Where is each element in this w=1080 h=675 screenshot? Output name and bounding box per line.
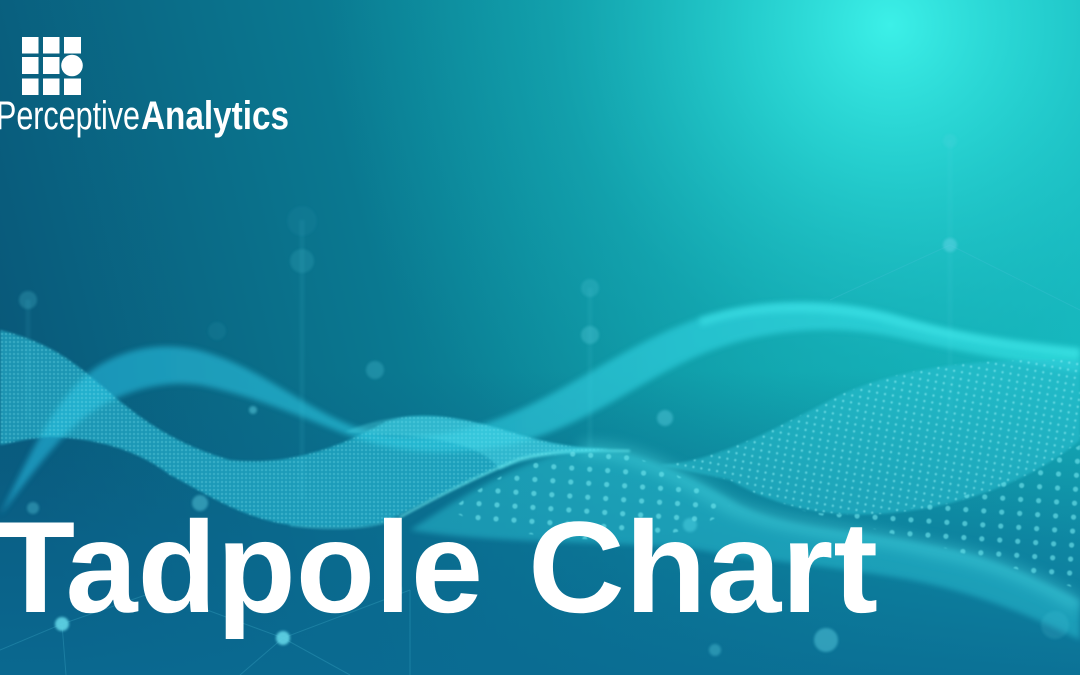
- logo grid icon: [22, 37, 83, 95]
- light ribbon wave: [0, 302, 1080, 515]
- dot mesh wave centre and lower right: [410, 445, 1080, 640]
- title: Tadpole: [0, 494, 483, 640]
- title: Chart: [528, 494, 878, 640]
- dot mesh wave left: [0, 330, 630, 528]
- dot mesh wave right: [660, 360, 1080, 515]
- logo wordmark: Perceptive: [0, 94, 140, 138]
- logo wordmark: Analytics: [141, 94, 289, 138]
- logo: Perceptive Analytics: [0, 37, 289, 138]
